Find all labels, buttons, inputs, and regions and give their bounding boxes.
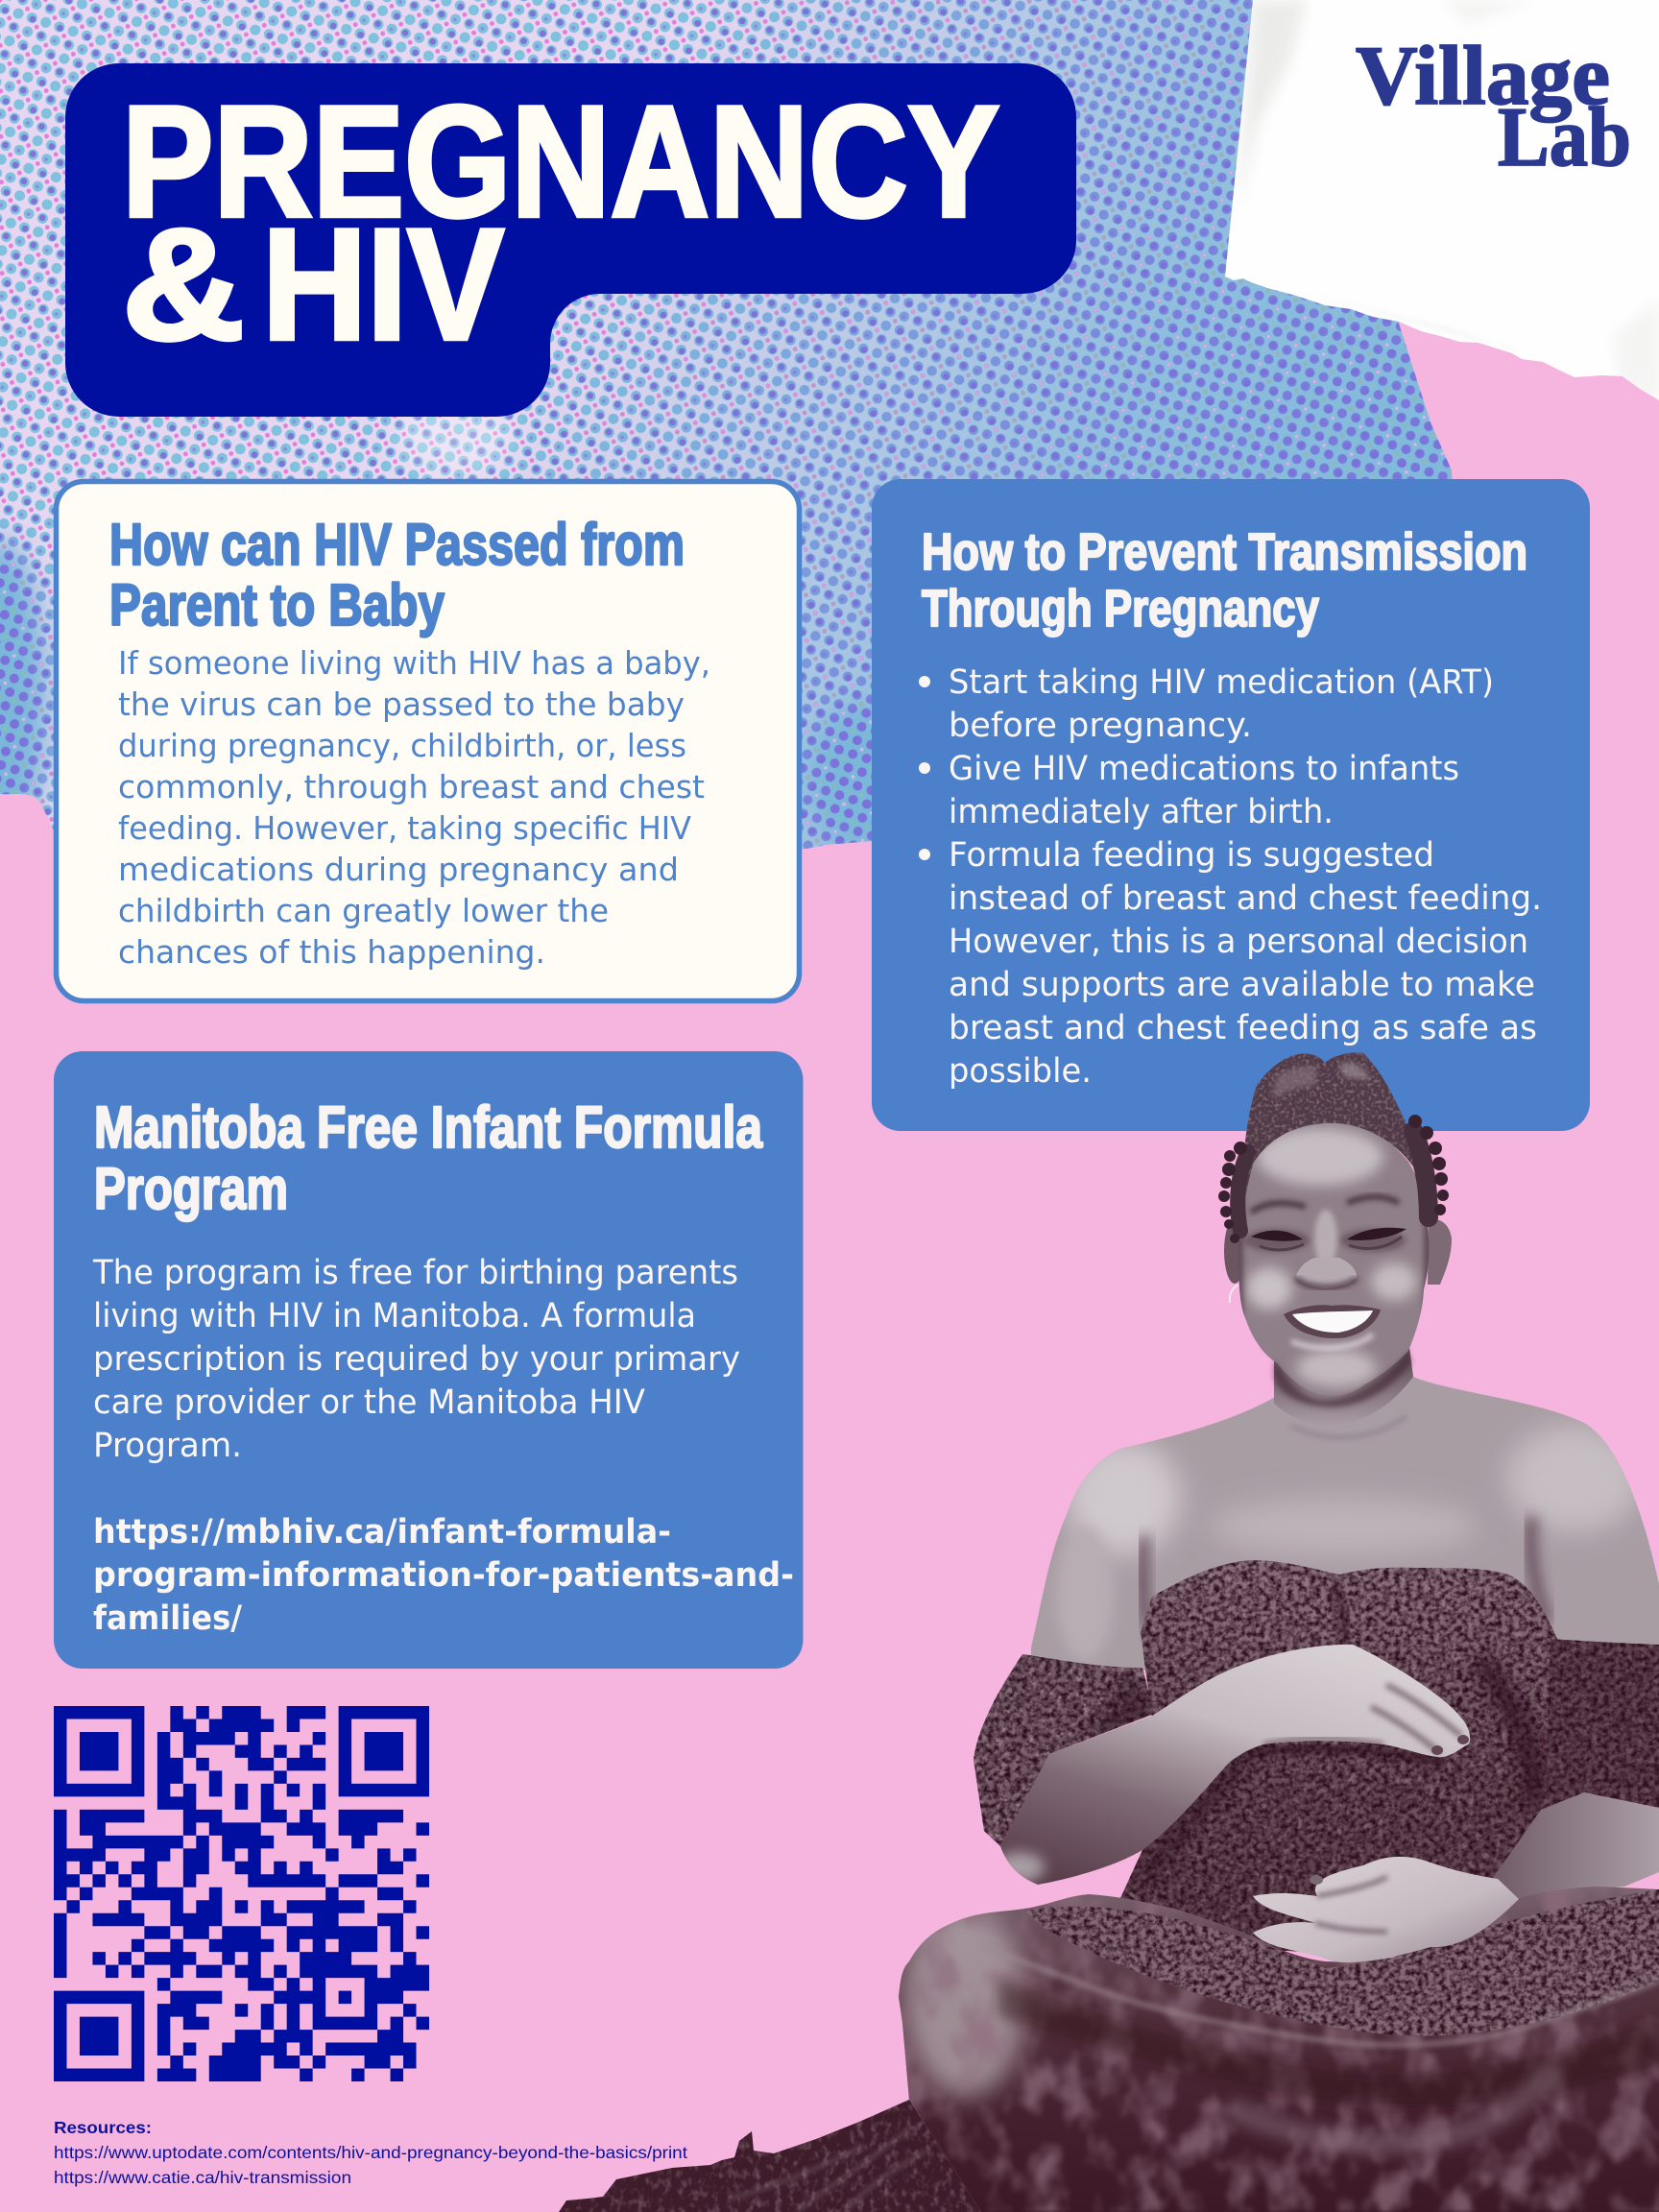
bullet list text: Give HIV medications to infants (949, 750, 1459, 788)
link text: program URL: https://mbhiv.ca/infant-formula- (93, 1513, 671, 1551)
body text: program details: prescription is required by your primary (93, 1340, 740, 1379)
eyebrows (1251, 1197, 1399, 1213)
right twists (1408, 1115, 1449, 1217)
heading: how can HIV passed: Parent to Baby (109, 572, 445, 637)
halftone torn paper background (0, 0, 1452, 849)
shoulders and chest (1031, 1375, 1659, 1671)
bullet list text: possible. (949, 1052, 1092, 1091)
face (1224, 1114, 1452, 1437)
dress bodice and belly (1120, 1560, 1558, 1957)
under chin shadow (1274, 1352, 1411, 1407)
link text: program URL: program-information-for-patients-and- (93, 1556, 794, 1595)
left sleeve (974, 1654, 1154, 1846)
earring (1230, 1285, 1238, 1303)
right forearm (1490, 1792, 1659, 1901)
bullet list text: and supports are available to make (949, 966, 1535, 1004)
mouth (1284, 1305, 1381, 1338)
body text: transmission explanation: commonly, through breast and chest (118, 768, 705, 805)
title text: PREGNANCY (122, 73, 999, 250)
logo: Village Lab: Lab (1498, 91, 1631, 184)
body text: transmission explanation: the virus can be passed to the baby (118, 685, 685, 723)
hair (1218, 1052, 1449, 1243)
left forearm and upper hand (995, 1637, 1479, 1891)
body text: transmission explanation (118, 644, 710, 971)
photo: smiling pregnant woman (547, 1052, 1659, 2212)
bullet dots (919, 676, 930, 860)
title text: HIV (262, 196, 504, 373)
teeth (1292, 1310, 1373, 1333)
left ear (1224, 1218, 1245, 1284)
heading: prevent transmission: How to Prevent Transmission (922, 523, 1527, 581)
heading: prevent transmission (922, 523, 1527, 637)
resources list (54, 2118, 687, 2187)
torn white paper (1225, 0, 1659, 403)
bullet list text: breast and chest feeding as safe as (949, 1009, 1537, 1047)
title text: & (122, 196, 245, 373)
body text: program details: care provider or the Manitoba HIV (93, 1383, 645, 1422)
heading: how can HIV passed: How can HIV Passed from (109, 512, 685, 577)
body text: transmission explanation: feeding. However, taking specific HIV (118, 809, 691, 847)
link text: program URL (93, 1513, 794, 1638)
heading: how can HIV passed (109, 512, 685, 637)
resources list: https://www.catie.ca/hiv-transmission (54, 2168, 351, 2187)
body text: transmission explanation: medications during pregnancy and (118, 851, 679, 888)
panel: how can HIV pass from parent to baby (56, 482, 799, 1000)
bullet list text: immediately after birth. (949, 793, 1334, 831)
body text: transmission explanation: childbirth can greatly lower the (118, 892, 609, 929)
heading: Manitoba program: Program (94, 1156, 288, 1221)
panel: how to prevent transmission (872, 479, 1590, 1131)
logo: Village Lab: Village (1356, 30, 1610, 123)
QR code (54, 1713, 429, 2075)
body text: program details: living with HIV in Manitoba. A formula (93, 1297, 696, 1335)
right sleeve (1536, 1637, 1659, 1815)
body text: program details: Program. (93, 1427, 242, 1465)
left twists (1218, 1142, 1248, 1243)
neck (1274, 1339, 1413, 1426)
bullet list text: Formula feeding is suggested (949, 836, 1434, 875)
title text (122, 73, 999, 373)
panel: Manitoba free infant formula program (54, 1051, 803, 1669)
bullet list text (949, 663, 1542, 1091)
skirt over crossed legs (893, 1882, 1659, 2212)
bullet list text: However, this is a personal decision (949, 923, 1528, 961)
title banner (65, 63, 1076, 417)
body text: transmission explanation: chances of this happening. (118, 933, 545, 971)
heading: prevent transmission: Through Pregnancy (922, 580, 1319, 637)
resources list: https://www.uptodate.com/contents/hiv-and-pregnancy-beyond-the-basics/print (54, 2143, 687, 2162)
dress train on ground (559, 2100, 981, 2212)
bullet list text: Start taking HIV medication (ART) (949, 663, 1494, 702)
resources list: Resources: (54, 2118, 152, 2137)
fingernails of upper hand (1431, 1735, 1469, 1755)
neck creases (1291, 1416, 1407, 1437)
heading: Manitoba program: Manitoba Free Infant Formula (94, 1094, 763, 1160)
logo: Village Lab (1356, 30, 1631, 184)
bullet list text: instead of breast and chest feeding. (949, 879, 1542, 918)
nose (1296, 1258, 1357, 1288)
link text: program URL: families/ (93, 1599, 242, 1638)
heading: Manitoba program (94, 1094, 763, 1221)
left eye (1251, 1231, 1303, 1241)
body text: program details (92, 1254, 740, 1465)
body text: transmission explanation: If someone living with HIV has a baby, (118, 644, 710, 682)
body text: program details: The program is free for birthing parents (92, 1254, 738, 1292)
right ear (1428, 1219, 1452, 1285)
right eye (1347, 1228, 1407, 1240)
lower hand (1253, 1857, 1519, 1962)
bullet list text: before pregnancy. (949, 707, 1252, 745)
body text: transmission explanation: during pregnancy, childbirth, or, less (118, 727, 686, 764)
